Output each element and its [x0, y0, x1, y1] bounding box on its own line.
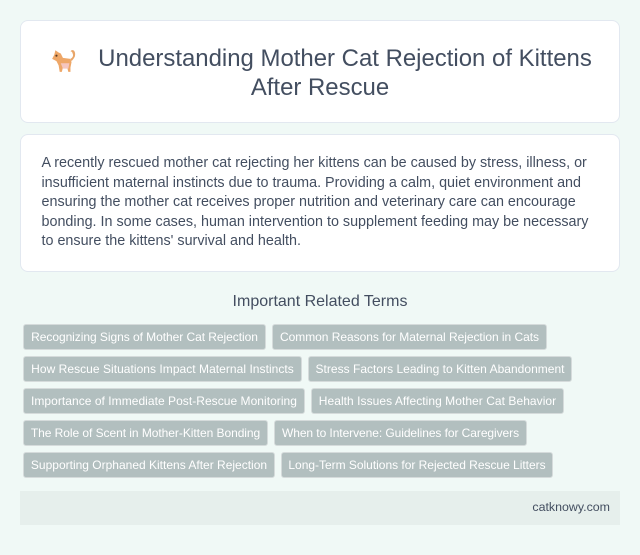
tag: Common Reasons for Maternal Rejection in Cats	[280, 330, 539, 344]
tag	[308, 356, 572, 382]
tag	[23, 356, 302, 382]
tag	[272, 324, 547, 350]
icon: cat	[52, 50, 76, 72]
tag: Stress Factors Leading to Kitten Abandonment	[315, 362, 565, 376]
tag: When to Intervene: Guidelines for Caregivers	[282, 426, 519, 440]
tag	[274, 420, 527, 446]
tag: Supporting Orphaned Kittens After Rejection	[31, 458, 267, 472]
description text	[42, 155, 588, 249]
description text: ensuring the mother cat receives proper nutrition and veterinary care can encourage	[42, 194, 576, 210]
tag: Health Issues Affecting Mother Cat Behavior	[319, 394, 556, 408]
tag: Importance of Immediate Post-Rescue Monitoring	[31, 394, 297, 408]
heading: related terms: Important Related Terms	[233, 293, 407, 310]
title text: After Rescue	[251, 74, 389, 101]
footer source text: catknowy.com	[532, 500, 610, 514]
description text: insufficient maternal instincts due to trauma. Providing a calm, quiet environment and	[42, 175, 581, 191]
title card	[20, 20, 620, 123]
title text: Understanding Mother Cat Rejection of Kittens	[98, 45, 592, 72]
tag: The Role of Scent in Mother-Kitten Bonding	[31, 426, 260, 440]
tag	[23, 324, 266, 350]
tag: Recognizing Signs of Mother Cat Rejection	[31, 330, 258, 344]
description text: to ensure the kittens' survival and health.	[42, 233, 301, 249]
tag	[23, 452, 275, 478]
description text: A recently rescued mother cat rejecting her kittens can be caused by stress, illness, or	[42, 155, 587, 171]
tag: How Rescue Situations Impact Maternal Instincts	[31, 362, 294, 376]
tag	[23, 420, 268, 446]
footer bar	[20, 491, 620, 525]
tag	[23, 388, 305, 414]
tag	[281, 452, 553, 478]
description text: bonding. In some cases, human intervention to supplement feeding may be necessary	[42, 214, 588, 230]
description card	[20, 134, 620, 272]
tag list	[23, 324, 572, 478]
tag	[311, 388, 564, 414]
title text	[98, 45, 592, 101]
tag: Long-Term Solutions for Rejected Rescue Litters	[288, 458, 546, 472]
